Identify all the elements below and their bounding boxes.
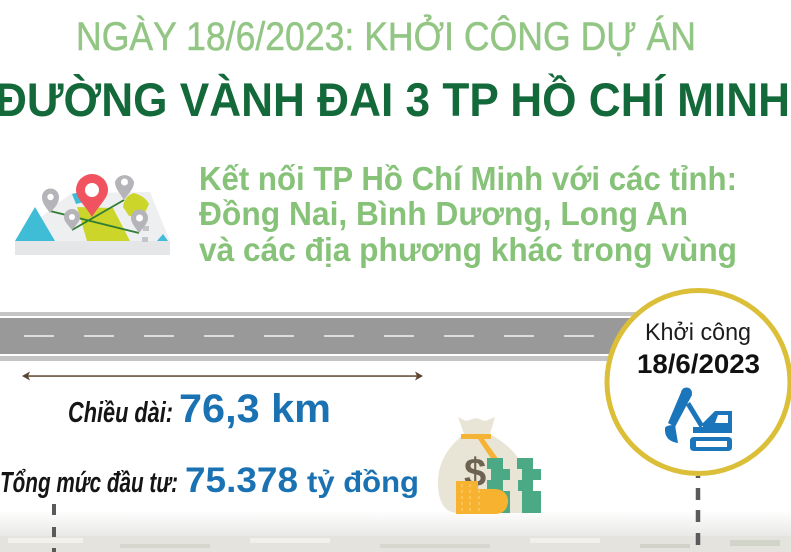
investment label: Tổng mức đầu tư: <box>0 467 178 499</box>
icon: excavator <box>665 388 732 451</box>
connection text: Đồng Nai, Bình Dương, Long An <box>199 195 688 232</box>
investment label: tỷ đồng <box>307 466 419 499</box>
investment label <box>0 461 419 500</box>
icon: money bag with cash and coins: $ <box>464 451 486 495</box>
length label <box>68 387 331 431</box>
icon: money bag with cash and coins <box>438 417 541 514</box>
bottom city backdrop <box>0 510 791 552</box>
investment label: 75.378 <box>185 461 298 500</box>
connection text: Kết nối TP Hồ Chí Minh với các tỉnh: <box>199 160 737 197</box>
right dashed marker <box>696 476 700 545</box>
start date badge <box>607 290 790 474</box>
icon: map with location pins <box>15 174 170 255</box>
length label: 76,3 km <box>179 387 331 431</box>
connection text: và các địa phương khác trong vùng <box>199 231 737 268</box>
start date badge: 18/6/2023 <box>637 349 760 379</box>
title line 1: NGÀY 18/6/2023: KHỞI CÔNG DỰ ÁN <box>76 13 696 59</box>
length label: Chiều dài: <box>68 397 173 429</box>
start date badge: Khởi công <box>645 319 751 346</box>
length arrow <box>22 372 423 380</box>
road <box>0 312 640 361</box>
connection text <box>199 160 737 268</box>
left dashed marker <box>52 504 56 552</box>
